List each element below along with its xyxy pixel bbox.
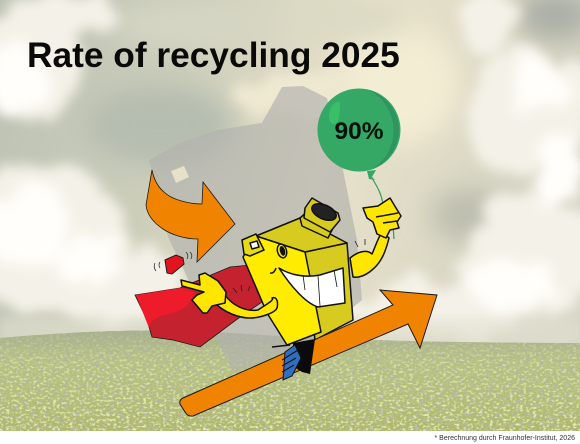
bottle front face — [243, 236, 321, 345]
spring leg — [272, 339, 315, 380]
field — [0, 325, 580, 431]
yellow bottle character — [242, 198, 353, 345]
balloon value: 90% — [334, 118, 384, 145]
bottle top shoulder — [256, 218, 347, 252]
big orange rising arrow — [180, 290, 437, 416]
green balloon — [318, 88, 400, 180]
handle — [242, 234, 264, 256]
cap neck and cap — [300, 211, 334, 238]
label window on silhouette — [171, 166, 189, 183]
orange arrow pointing right — [146, 170, 235, 262]
left arm pointing — [181, 273, 277, 318]
grey bottle silhouette — [149, 86, 362, 373]
cape — [135, 265, 262, 347]
balloon string — [372, 178, 394, 239]
heading: Rate of recycling 2025 — [27, 36, 400, 75]
eye — [276, 243, 288, 259]
footer strip — [0, 431, 580, 444]
smile — [279, 268, 345, 307]
flying bottle cap — [154, 252, 192, 274]
source note: * Berechnung durch Fraunhofer-Institut, 2026 — [435, 435, 575, 442]
bottle side face — [305, 243, 353, 340]
clouds — [0, 0, 580, 340]
sky background — [0, 0, 580, 348]
flex marks — [233, 239, 365, 293]
right arm and fist — [350, 198, 401, 277]
